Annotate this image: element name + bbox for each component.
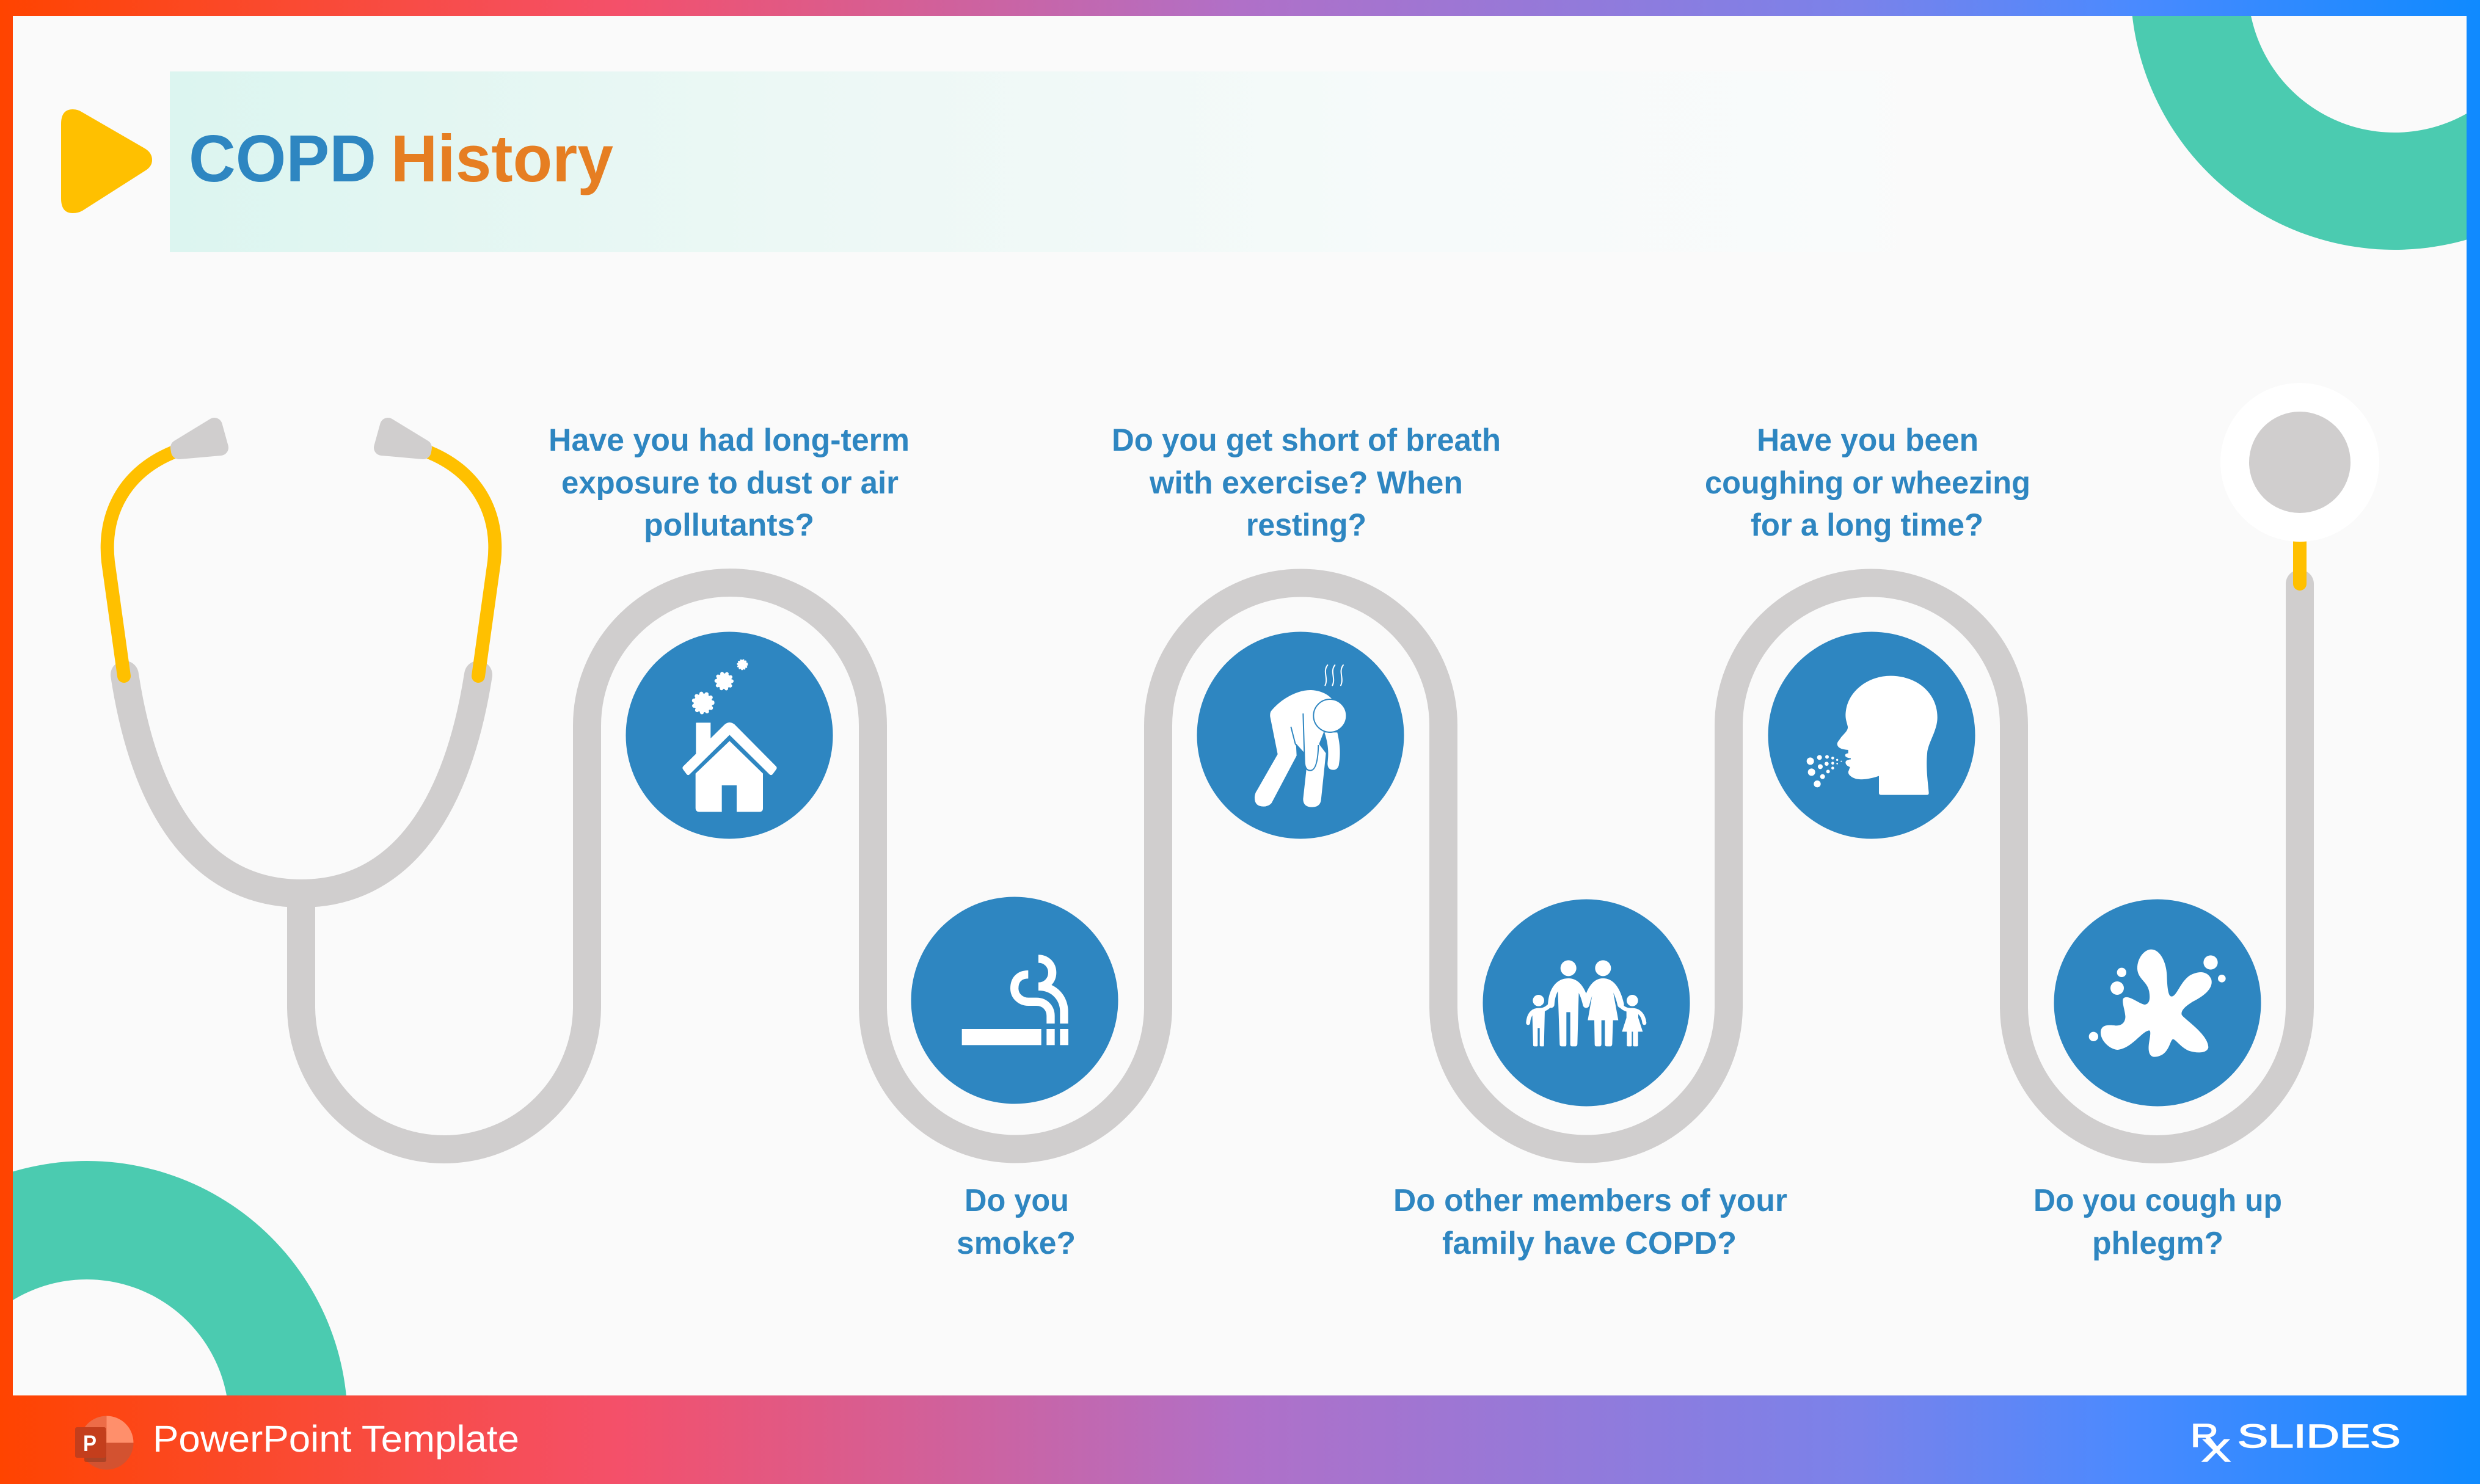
question text: exposure to dust or air bbox=[561, 465, 899, 501]
footer left: PowerPoint label bbox=[75, 1416, 519, 1469]
step 5: coughing bbox=[1705, 423, 2030, 839]
question text: Do other members of your bbox=[1393, 1183, 1787, 1218]
step 1: dust exposure bbox=[549, 423, 910, 839]
question text bbox=[1705, 423, 2030, 543]
icon: family bbox=[1528, 960, 1644, 1046]
icon: play triangle bbox=[61, 109, 152, 213]
left earpiece bbox=[178, 426, 221, 451]
step 3: breathlessness bbox=[1112, 423, 1501, 839]
step 6: phlegm bbox=[2033, 899, 2282, 1261]
footer right: RxSlides logo: X bbox=[2201, 1433, 2231, 1469]
footer right: RxSlides logo: SLIDES bbox=[2237, 1418, 2401, 1455]
serpentine tube bbox=[301, 583, 2300, 1149]
question text: Have you had long-term bbox=[549, 423, 910, 458]
question text: for a long time? bbox=[1751, 507, 1983, 543]
question text bbox=[2033, 1183, 2282, 1261]
question text: Do you bbox=[965, 1183, 1069, 1218]
question text: coughing or wheezing bbox=[1705, 465, 2030, 501]
question text: phlegm? bbox=[2092, 1226, 2223, 1261]
question text: Have you been bbox=[1757, 423, 1979, 458]
icon circle bbox=[1197, 631, 1404, 839]
stethoscope path bbox=[108, 383, 2379, 1149]
question text: smoke? bbox=[957, 1226, 1076, 1261]
question text: Do you get short of breath bbox=[1112, 423, 1501, 458]
question text: with exercise? When bbox=[1149, 465, 1463, 501]
question text: Do you cough up bbox=[2033, 1183, 2282, 1218]
icon circle bbox=[911, 897, 1118, 1104]
question text bbox=[1112, 423, 1501, 543]
yellow right ear tube bbox=[425, 451, 495, 676]
chest piece gray disc bbox=[2249, 412, 2351, 513]
title: History bbox=[391, 122, 613, 196]
yellow left ear tube bbox=[108, 451, 177, 676]
question text bbox=[1393, 1183, 1787, 1261]
icon: breathless person bbox=[1255, 665, 1346, 807]
Y headset tube bbox=[125, 675, 478, 893]
title: COPD bbox=[189, 122, 376, 196]
step 2: smoking bbox=[911, 897, 1118, 1261]
icon: phlegm splat bbox=[2089, 950, 2226, 1057]
yellow chest stem bbox=[2293, 541, 2307, 584]
icon circle bbox=[2054, 899, 2261, 1107]
right earpiece bbox=[382, 426, 424, 451]
decorative teal arc bottom left bbox=[9, 1161, 346, 1399]
question text: pollutants? bbox=[644, 507, 814, 543]
chest piece white ring bbox=[2220, 383, 2379, 542]
icon circle bbox=[1768, 631, 1975, 839]
title band bbox=[170, 71, 1941, 252]
footer text: PowerPoint Template bbox=[153, 1418, 519, 1460]
question text bbox=[549, 423, 910, 543]
question text: family have COPD? bbox=[1442, 1226, 1737, 1261]
icon: coughing head bbox=[1807, 676, 1938, 795]
icon: PowerPoint logo bbox=[75, 1416, 133, 1469]
footer right: RxSlides logo bbox=[2190, 1417, 2401, 1469]
icon: house with smoke bbox=[682, 660, 777, 812]
decorative teal arc top right bbox=[2132, 12, 2470, 250]
question text: resting? bbox=[1246, 507, 1366, 543]
icon circle bbox=[1483, 899, 1690, 1107]
footer right: RxSlides logo: R bbox=[2190, 1417, 2219, 1454]
icon circle bbox=[625, 631, 833, 839]
icon: cigarette bbox=[962, 959, 1068, 1045]
icon: PowerPoint logo: P bbox=[83, 1431, 97, 1456]
title bar bbox=[61, 71, 1941, 252]
question text bbox=[957, 1183, 1076, 1261]
step 4: family history bbox=[1393, 899, 1787, 1261]
